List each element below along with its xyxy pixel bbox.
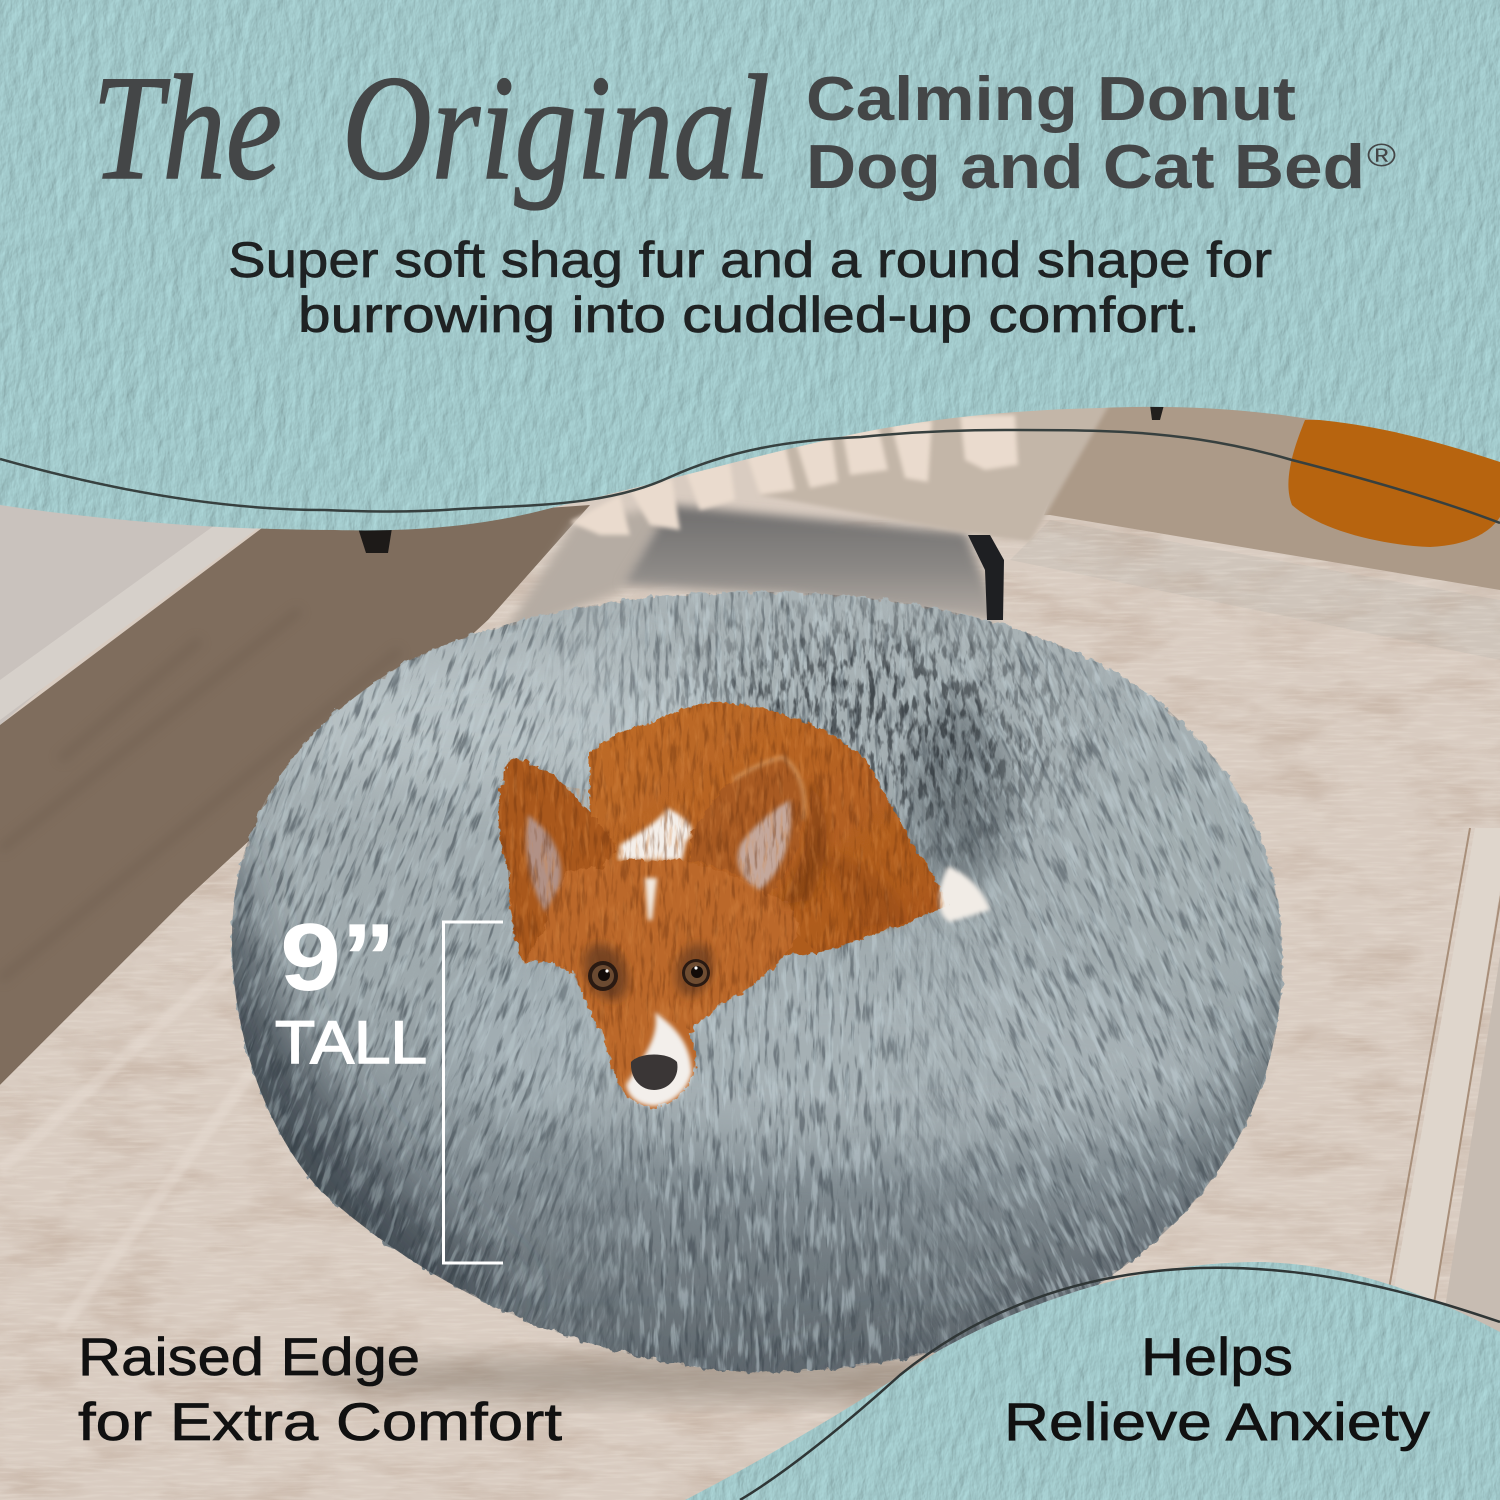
photo: bench with tassels (358, 400, 1164, 640)
right ear rim (733, 757, 804, 820)
left ear inner (526, 815, 561, 912)
heading: The Original script (92, 45, 770, 211)
white hip patch (939, 866, 990, 922)
heading: product name: ® (1367, 137, 1397, 173)
white neck patch (618, 808, 692, 860)
forehead mark (645, 878, 657, 920)
heading: The Original script: Original (342, 45, 770, 211)
heading: The Original script: The (92, 45, 282, 211)
body shadow folds (805, 850, 905, 932)
nose (631, 1054, 677, 1090)
heading: product name (806, 65, 1397, 202)
text block: subtitle (228, 232, 1272, 343)
heading: product name: Calming Donut (806, 65, 1296, 134)
callout: 9 inch tall (275, 904, 427, 1076)
text: helps relieve anxiety: Relieve Anxiety (1004, 1393, 1431, 1452)
rug: blotches and weave (0, 520, 1500, 1500)
photo: donut bed (230, 590, 1284, 1414)
upper floor (1040, 400, 1500, 600)
callout: 9 inch tall: TALL (275, 1009, 427, 1076)
right ear (690, 757, 804, 895)
fur strands: left sector (232, 603, 641, 1351)
panel: bottom right teal (685, 1260, 1500, 1500)
bench legs (968, 535, 1004, 620)
bed shading (232, 834, 524, 1319)
fur strands: centre sector (538, 592, 988, 1372)
curve line (0, 430, 1500, 523)
sofa (0, 500, 262, 725)
photo: orange pouf (1288, 420, 1500, 547)
dog fur texture (498, 703, 950, 1092)
tassels (570, 415, 1018, 535)
text block: subtitle: Super soft shag fur and a round shape for (228, 232, 1272, 288)
photo: room background (0, 400, 1500, 1500)
head (509, 859, 798, 1107)
fur strands: right sector (888, 603, 1282, 1360)
ear shadow on body (780, 780, 827, 905)
wood floor (0, 505, 590, 1085)
muzzle white (626, 1012, 692, 1106)
callout: 9 inch tall: 9” (280, 904, 396, 1011)
text: helps relieve anxiety (1004, 1328, 1431, 1452)
text block: raised edge: for Extra Comfort (78, 1393, 562, 1452)
photo: corgi dog (490, 700, 1000, 1120)
text: helps relieve anxiety: Helps (1141, 1328, 1293, 1387)
heading: product name: Dog and Cat Bed (806, 133, 1365, 202)
eyes (588, 961, 618, 991)
panel: top teal header (0, 0, 1500, 535)
text block: subtitle: burrowing into cuddled-up comfort. (298, 287, 1200, 343)
dark tips around the hole (625, 592, 1115, 879)
height bracket (444, 922, 503, 1263)
curve line (740, 1268, 1500, 1500)
eye patches (575, 936, 637, 1008)
left ear (498, 757, 617, 962)
right ear inner (738, 800, 791, 890)
text block: raised edge (78, 1328, 562, 1452)
dog body (590, 703, 950, 960)
text block: raised edge: Raised Edge (78, 1328, 420, 1387)
rug (0, 515, 1500, 1500)
